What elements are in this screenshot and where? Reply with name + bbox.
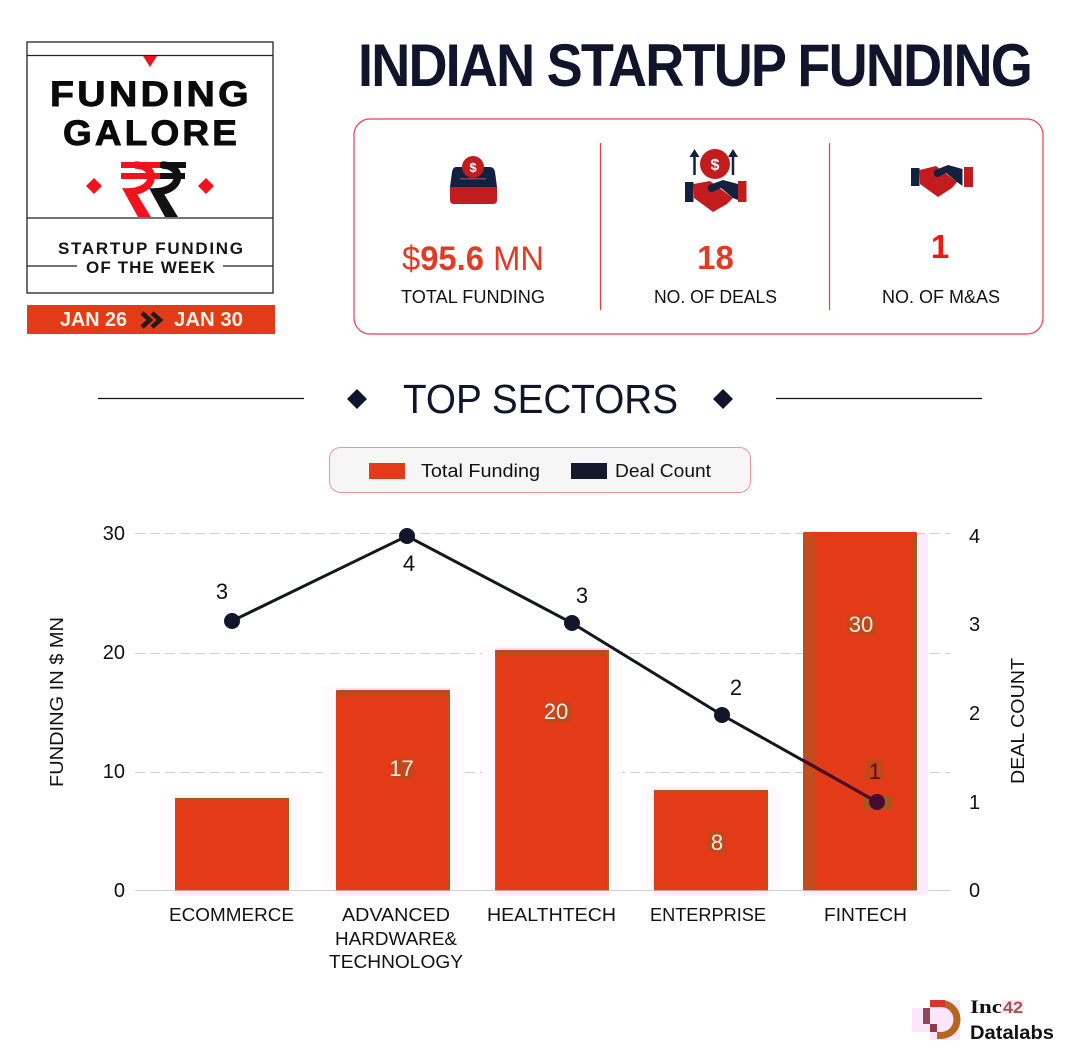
bar: enterprise: 8 (711, 830, 723, 855)
bar: advanced hardware: 17 (389, 756, 414, 781)
category labels: HEALTHTECH (487, 904, 616, 925)
category labels: HARDWARE& (335, 928, 458, 949)
category labels: FINTECH (824, 904, 907, 925)
right axis: 1 (969, 792, 980, 814)
bar: advanced hardware (323, 686, 463, 896)
category labels: ENTERPRISE (650, 904, 766, 925)
legend: deal count: Deal Count (615, 461, 711, 481)
line series: deal count: 3 (216, 579, 228, 604)
text: startup funding of the week (58, 239, 243, 277)
text: Inc42: Inc (970, 997, 1002, 1018)
icon: deal handshake with coin: $ (711, 157, 720, 174)
line series: deal count: 3 (576, 583, 588, 608)
left axis (103, 523, 125, 902)
legend (330, 448, 750, 492)
left axis: 0 (114, 880, 125, 902)
heading: top sectors (98, 376, 982, 422)
stat: total funding: $95.6 MN (402, 240, 544, 278)
panel: key figures (354, 119, 1043, 334)
icon: datalabs D mark (912, 1000, 961, 1040)
date banner: JAN 26 (60, 309, 127, 331)
bar: healthtech: 20 (544, 699, 568, 724)
bar: fintech: 30 (849, 612, 873, 637)
icon: double chevron (142, 313, 160, 327)
icon: double rupee symbol (121, 162, 186, 217)
icon: left diamond (86, 178, 102, 194)
right axis: 2 (969, 703, 980, 725)
line series: deal count: 4 (403, 551, 415, 576)
stat: number of M&As: 1 (931, 228, 949, 265)
bar: fintech (803, 532, 928, 895)
icon: coin into box (450, 156, 497, 204)
category labels: ADVANCED (342, 904, 450, 925)
heading: funding galore: GALORE (63, 114, 240, 153)
stat: total funding (401, 240, 545, 307)
stat: number of M&As: NO. OF M&AS (882, 287, 1000, 307)
left axis title: FUNDING IN $ MN (47, 617, 67, 787)
stat: number of deals (654, 239, 777, 307)
category labels: TECHNOLOGY (329, 951, 463, 972)
right axis (969, 526, 980, 902)
heading: funding galore: FUNDING (50, 75, 252, 114)
right axis: 4 (969, 526, 980, 548)
text: Datalabs: Datalabs (970, 1022, 1054, 1044)
line series: deal count (216, 528, 885, 810)
left axis: 30 (103, 523, 125, 545)
logo: Inc42 Datalabs (912, 997, 1054, 1044)
bar: ecommerce (162, 792, 302, 896)
left axis: 10 (103, 761, 125, 783)
text: startup funding of the week: STARTUP FUNDING (58, 239, 243, 258)
bar: enterprise (641, 785, 781, 896)
icon: deal handshake with coin (685, 149, 746, 212)
text: Inc42 (970, 997, 1024, 1018)
icon: red marker triangle (143, 56, 157, 67)
stat: number of deals: 18 (697, 239, 734, 276)
date banner (27, 305, 275, 334)
stat: total funding: TOTAL FUNDING (401, 287, 545, 307)
legend: total funding: Total Funding (421, 461, 540, 481)
date banner: JAN 30 (174, 309, 243, 331)
heading: top sectors: TOP SECTORS (403, 376, 678, 422)
stat: number of M&As (882, 228, 1000, 307)
heading: funding galore (50, 75, 252, 153)
right axis title: DEAL COUNT (1008, 658, 1028, 784)
text: startup funding of the week: OF THE WEEK (86, 258, 216, 277)
line series: deal count: 2 (730, 675, 742, 700)
chart: funding bars and deal count line (47, 523, 1028, 972)
stat: number of deals: NO. OF DEALS (654, 287, 777, 307)
legend: total funding (369, 461, 540, 481)
category labels: ECOMMERCE (169, 904, 294, 925)
icon: right diamond (198, 178, 214, 194)
bar: healthtech (482, 646, 622, 896)
line series: deal count: 1 (869, 759, 881, 784)
icon: handshake (911, 165, 973, 197)
legend: deal count (571, 461, 711, 481)
icon: coin into box: $ (469, 160, 477, 175)
text: Inc42: 42 (1003, 998, 1023, 1017)
panel: funding galore badge (27, 42, 273, 293)
right axis: 3 (969, 614, 980, 636)
right axis: 0 (969, 880, 980, 902)
left axis: 20 (103, 642, 125, 664)
category labels (169, 904, 907, 972)
